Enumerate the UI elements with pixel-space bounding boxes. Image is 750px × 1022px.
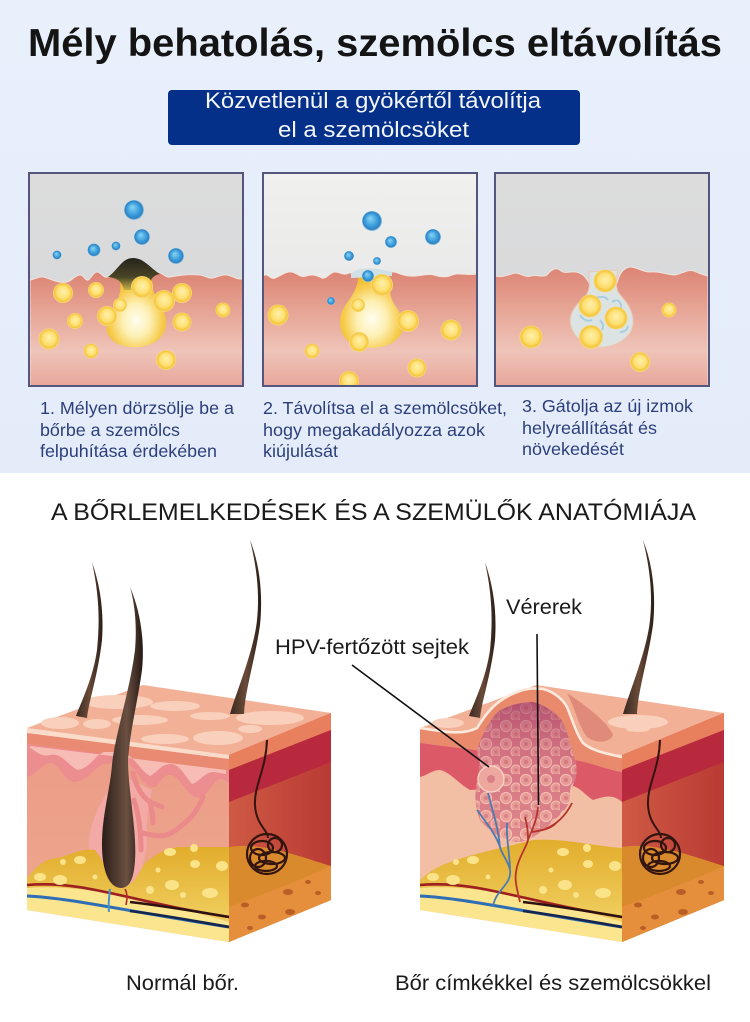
orange bump layer <box>420 688 622 772</box>
blob: softened wart <box>106 276 166 347</box>
text: step 3: növekedését <box>522 439 624 459</box>
text: step 3: helyreállítását és <box>522 418 657 438</box>
text: step 2: kiújulását <box>263 441 338 461</box>
section heading: A BŐRLEMELKEDÉSEK ÉS A SZEMÜLŐK ANATÓMIÁJA <box>51 499 697 526</box>
panel: step 1 illustration <box>29 173 243 386</box>
bubbles: blue <box>52 200 184 264</box>
text: step 2 <box>263 398 507 461</box>
hair: central follicle <box>102 587 143 888</box>
blood vessels: arteries <box>516 803 572 902</box>
bubbles: yellow <box>520 270 676 372</box>
text: step 1: 1. Mélyen dörzsölje be a <box>40 398 234 418</box>
title: Mély behatolás, szemölcs eltávolítás <box>28 22 722 65</box>
leader line: HPV cells <box>352 665 489 767</box>
label: HPV cells: HPV-fertőzött sejtek <box>275 636 470 659</box>
panel: step 2 illustration <box>263 173 477 391</box>
text: step 3 <box>522 396 693 459</box>
text: step 3: 3. Gátolja az új izmok <box>522 396 693 416</box>
banner <box>168 88 580 145</box>
fat layer <box>27 847 229 922</box>
banner: Közvetlenül a gyökértől távolítja <box>205 88 542 113</box>
caption: warts: Bőr címkékkel és szemölcsökkel <box>395 972 711 995</box>
white skin outline <box>420 688 622 757</box>
cavity marks <box>580 297 628 332</box>
sebaceous branches <box>133 773 203 850</box>
blood vessels: veins <box>477 793 510 907</box>
banner: el a szemölcsöket <box>278 117 470 142</box>
red dermis wave <box>420 743 622 802</box>
wart cell mass <box>475 702 577 842</box>
label: blood vessels: Vérerek <box>506 596 583 619</box>
fat layer <box>420 840 622 922</box>
bubbles: blue <box>327 211 441 305</box>
text: step 1: bőrbe a szemölcs <box>40 420 180 440</box>
diagram: skin with wart <box>420 540 724 942</box>
caption: normal skin: Normál bőr. <box>126 972 239 995</box>
bubbles: yellow <box>268 274 462 391</box>
wart cap <box>108 258 160 290</box>
text: step 2: 2. Távolítsa el a szemölcsöket, <box>263 398 507 418</box>
blob: extracted wart <box>340 272 404 348</box>
background panel <box>0 0 750 473</box>
pink wave layer <box>27 744 229 798</box>
vessels to follicle <box>109 889 110 912</box>
cavity <box>570 270 633 347</box>
text: step 2: hogy megakadályozza azok <box>263 420 485 440</box>
diagram: normal skin <box>27 540 331 942</box>
skin flap <box>567 693 613 742</box>
follicle <box>89 775 152 888</box>
leader line: blood vessels <box>537 634 538 805</box>
bubbles: yellow <box>38 276 230 370</box>
panel: step 3 illustration <box>495 173 709 386</box>
text: step 1: felpuhítása érdekében <box>40 441 217 461</box>
text: step 1 <box>40 398 234 461</box>
